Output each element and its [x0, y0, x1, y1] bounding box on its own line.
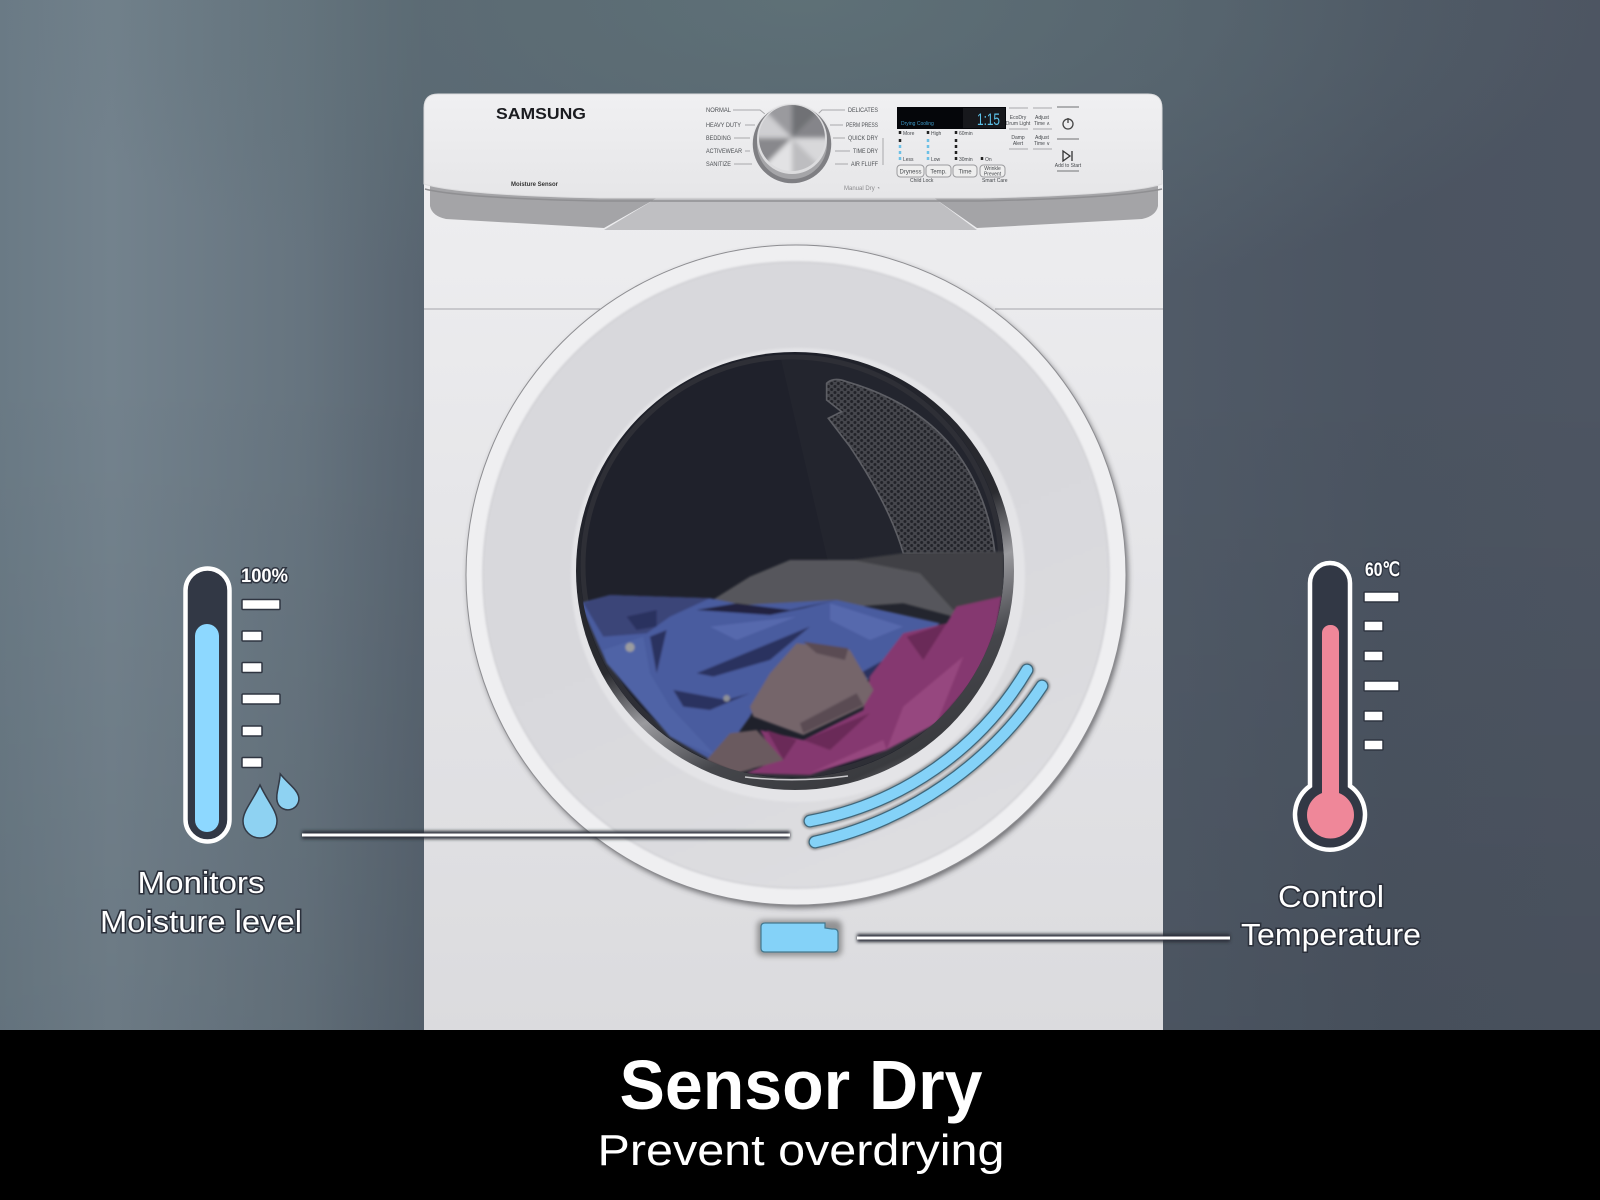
option indicators: 30min [959, 157, 973, 163]
moisture caption: Monitors [138, 865, 264, 900]
power and start controls [1055, 107, 1082, 171]
digital display [897, 107, 1006, 129]
dryer body [424, 170, 1163, 1035]
moisture gauge [100, 566, 302, 939]
gauge ticks [242, 600, 280, 768]
icon: water drops [243, 771, 302, 838]
option buttons: Smart Care [982, 178, 1008, 184]
cycle labels: DELICATES [848, 108, 878, 114]
option buttons: Wrinkle [984, 166, 1001, 172]
moisture sensor badge: Moisture Sensor [511, 181, 558, 188]
thermometer ticks [1364, 592, 1399, 750]
option indicators: 60min [959, 131, 973, 137]
option buttons: Time [958, 170, 972, 176]
blue garment [580, 595, 940, 763]
drum window [580, 354, 1020, 778]
dryer [424, 88, 1163, 1035]
moisture level fill [195, 624, 219, 832]
grey garment [714, 558, 955, 617]
thermometer outline [1295, 563, 1365, 850]
moisture caption: Moisture level [100, 904, 302, 939]
cycle labels: BEDDING [706, 136, 731, 142]
manual dry label: Manual Dry ◔ [844, 186, 880, 192]
right option labels: Drum Light [1006, 121, 1031, 127]
caption band [0, 1030, 1600, 1200]
power and start controls: Add to Start [1055, 163, 1082, 169]
right option labels: Time ∧ [1034, 121, 1050, 127]
cycle labels: TIME DRY [853, 149, 878, 155]
thermometer maximum label: 60℃ [1365, 560, 1400, 581]
option buttons: Prevent [984, 172, 1002, 178]
temperature leader line [857, 934, 1230, 942]
gauge tube [186, 568, 230, 842]
option indicators: High [931, 131, 942, 137]
rim highlight [745, 776, 848, 780]
door [466, 245, 1128, 908]
option indicators: Low [931, 157, 941, 163]
magenta garment [747, 597, 1002, 775]
option buttons [897, 165, 1008, 184]
digital display: 1:15 [977, 110, 1000, 129]
drum interior shading [994, 502, 1004, 632]
cycle labels: QUICK DRY [848, 136, 878, 142]
moisture sensor strips [810, 670, 1042, 842]
brand logo: SAMSUNG [496, 106, 586, 123]
right option labels: EcoDry [1010, 115, 1027, 121]
title: Sensor Dry [620, 1046, 983, 1124]
option indicators: More [903, 131, 915, 137]
moisture caption [100, 865, 302, 939]
cycle labels: ACTIVEWEAR [706, 149, 743, 155]
temperature sensor [757, 920, 842, 956]
temperature caption: Temperature [1241, 917, 1421, 952]
thermometer fill [1307, 625, 1354, 838]
moisture leader line [302, 831, 790, 839]
temperature gauge [1241, 560, 1421, 952]
right option labels: Adjust [1035, 115, 1050, 121]
subtitle: Prevent overdrying [598, 1126, 1004, 1175]
cycle labels: PERM PRESS [846, 123, 878, 129]
cycle labels: NORMAL [706, 108, 732, 114]
cycle labels: HEAVY DUTY [706, 123, 741, 129]
option indicators [900, 131, 992, 163]
right option labels: Time ∨ [1034, 141, 1050, 147]
control panel [424, 88, 1162, 198]
digital display: Drying Cooling [901, 121, 934, 127]
cycle labels: SANITIZE [706, 162, 731, 168]
dial [752, 104, 832, 184]
right option labels: Adjust [1035, 135, 1050, 141]
clothes [580, 552, 1003, 775]
option buttons: Dryness [899, 170, 922, 176]
gauge maximum label: 100% [241, 566, 288, 587]
right option labels: Alert [1013, 141, 1024, 147]
right option labels [1006, 108, 1052, 149]
handle recess [425, 186, 1162, 230]
option indicators: On [985, 157, 992, 163]
cycle labels: AIR FLUFF [851, 162, 878, 168]
brown garment [750, 643, 873, 735]
temperature caption [1241, 879, 1421, 952]
temperature caption: Control [1278, 879, 1384, 914]
option buttons: Child Lock [910, 178, 934, 184]
body seam [424, 308, 1163, 310]
option buttons: Temp. [930, 170, 947, 176]
right option labels: Damp [1011, 135, 1025, 141]
cycle labels [706, 108, 883, 168]
option indicators: Less [903, 157, 914, 163]
window rim [571, 348, 1025, 802]
perforated drum baffle [827, 380, 995, 553]
